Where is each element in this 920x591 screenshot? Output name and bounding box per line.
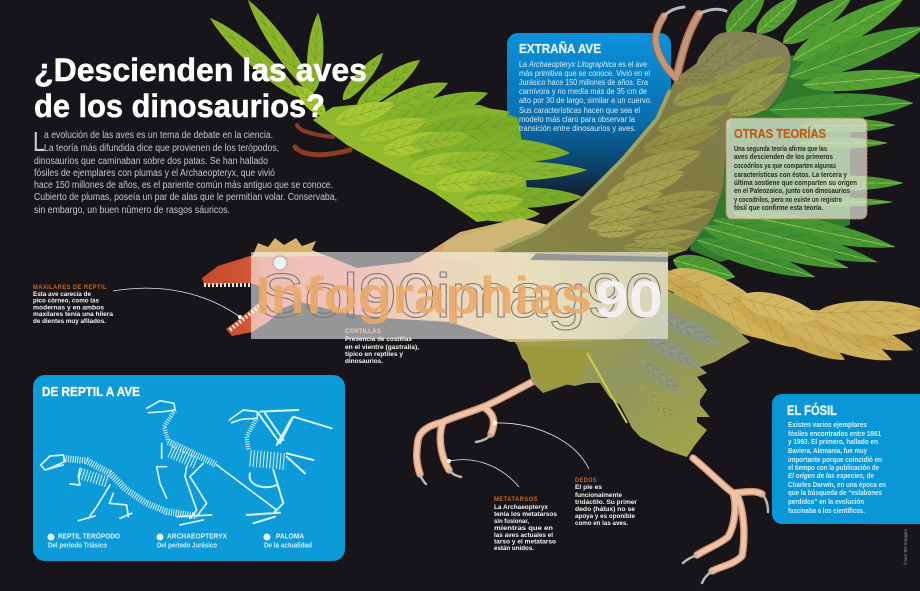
callout: metatarsos: mientras que en (494, 525, 553, 532)
callout: metatarsos: La Archaeopteryx (494, 504, 548, 511)
green far wing feathers (204, 0, 587, 223)
right leg and foot (683, 458, 768, 583)
panel: el fósil: fósiles encontrados entre 1861 (788, 430, 881, 438)
callout lines (113, 288, 589, 487)
intro text: sin embargo, un buen número de rasgos sáuricos. (34, 205, 230, 216)
callout: metatarsos: están unidos. (494, 545, 534, 552)
watermark (251, 252, 668, 339)
panel: el fósil: el tiempo con la publicación de (788, 464, 879, 472)
callout: maxilares de reptil: MAXILARES DE REPTIL (33, 284, 107, 291)
text: extraña ave (519, 41, 652, 133)
intro text: a evolución de las aves es un tema de debate en la ciencia. (44, 130, 273, 141)
panel: el fósil: El origen de las especies, de (788, 472, 874, 480)
legend: reptil terópodo (48, 532, 120, 550)
legend: archaeopteryx (156, 532, 227, 550)
panel: otras teorías: cocodrilos ya que comparten algunas (734, 163, 836, 170)
callout: maxilares de reptil (33, 284, 113, 325)
callout: dedos (575, 477, 637, 527)
panel: otras teorías: OTRAS TEORÍAS (734, 126, 826, 141)
panel: el fósil (772, 394, 920, 524)
skeleton: paloma (229, 410, 332, 523)
left leg and foot (417, 378, 540, 484)
far wing claws (295, 125, 350, 155)
text: extraña ave: modelo más claro para observar la (519, 115, 636, 124)
crest (252, 238, 326, 257)
callout: costillas: COSTILLAS (345, 328, 381, 335)
panel: otras teorías: características con éstos. La tercera y (734, 172, 847, 179)
callout: maxilares de reptil: Esta ave carecía de (33, 291, 91, 298)
callout: costillas (345, 328, 419, 365)
golden tail feathers (660, 258, 920, 374)
panel: el fósil: que la búsqueda de “eslabones (788, 489, 882, 497)
callout: dedos: DEDOS (575, 477, 597, 484)
panel: otras teorías (726, 118, 867, 219)
legend: paloma: De la actualidad (264, 542, 312, 550)
panel: el fósil: Charles Darwin, en una época en (788, 481, 886, 489)
callout: maxilares de reptil: maxilares tenía una hilera (33, 311, 113, 318)
skeleton: reptil terópodo (41, 455, 197, 521)
legend: archaeopteryx: Del período Jurásico (157, 542, 217, 550)
legend: paloma: PALOMA (276, 532, 305, 540)
callout: dedos: tridáctilo. Su primer (575, 499, 637, 506)
intro text: dinosaurios que caminaban sobre dos patas. Se han hallado (34, 156, 268, 167)
teeth (204, 285, 262, 330)
text: extraña ave: carnívora y no medía más de 35 cm de (519, 87, 648, 96)
intro text: hace 150 millones de años, es el pariente común más antiguo que se conoce. (34, 180, 333, 191)
callout: costillas: en el vientre (gastralia), (345, 344, 419, 351)
text: extraña ave: alto por 30 de largo, similar a un cuervo. (519, 96, 652, 105)
text: extraña ave: más primitiva que se conoce. Vivió en el (519, 69, 650, 78)
panel: otras teorías: aves descienden de los primeros (734, 154, 833, 161)
panel: otras teorías: última sostiene que comparten su origen (734, 180, 857, 187)
callout: maxilares de reptil: modernas y en ambos (33, 304, 104, 312)
panel: otras teorías: en el Paleozoico, junto con dinosaurios (734, 188, 850, 195)
callout: maxilares de reptil: de dientes muy afilados. (33, 318, 106, 325)
panel: de reptil a ave (33, 375, 345, 561)
callout: metatarsos: tenía los metatarsos (494, 511, 557, 518)
text: extraña ave: transición entre dinosaurios y aves. (519, 124, 636, 133)
panel: otras teorías: y cocodrilos, pero no existe un registro (734, 197, 842, 204)
legend: archaeopteryx: ARCHAEOPTERYX (167, 532, 227, 540)
callout: dedos: dedo (hálux) no se (575, 506, 635, 513)
panel background: extraña ave (507, 33, 671, 203)
lower body plumage (505, 290, 750, 457)
panel: otras teorías: fósil que confirme esta teoría. (734, 205, 823, 212)
callout: dedos: como en las aves. (575, 520, 628, 527)
intro text: La teoría más difundida dice que provienen de los terópodos, (44, 143, 279, 154)
credit: ©Sol 90 Images (902, 528, 908, 565)
callout: metatarsos: tarso y el metatarso (494, 538, 556, 546)
callout: metatarsos: sin fusionar, (494, 518, 529, 525)
intro text: fósiles de ejemplares con plumas y el Archaeopteryx, que vivió (34, 168, 275, 179)
intro text: L (33, 126, 45, 157)
watermark: Infographias (255, 267, 592, 325)
callout: dedos: El pie es (575, 484, 602, 491)
callout: costillas: típico en reptiles y (345, 351, 403, 358)
legend: reptil terópodo: REPTIL TERÓPODO (58, 532, 120, 540)
panel: el fósil: y 1993. El primero, hallado en (788, 438, 878, 446)
callout: metatarsos: las aves actuales el (494, 532, 553, 539)
text: extraña ave: Jurásico hace 150 millones de años. Era (519, 78, 649, 87)
callout: dedos: apoya y es oponible (575, 513, 635, 520)
upper body tan patch (440, 220, 556, 258)
panel: el fósil: Existen varios ejemplares (788, 421, 867, 429)
title: de los dinosaurios? (34, 88, 325, 124)
panel: el fósil: importante porque coincidió en (788, 456, 882, 464)
callout: metatarsos (494, 496, 557, 552)
raised wing claws (656, 7, 726, 78)
panel: otras teorías: Una segunda teoría afirma que las (734, 146, 827, 153)
text: extraña ave: EXTRAÑA AVE (519, 41, 601, 56)
eye (273, 256, 287, 270)
skeleton: archaeopteryx (147, 401, 277, 525)
near wing (495, 30, 794, 257)
watermark: Sol90imag90 (258, 262, 663, 331)
callout: costillas: dinosaurios. (345, 358, 383, 365)
panel: el fósil: perdidos” en la evolución (788, 498, 864, 506)
head, neck and upper body (202, 218, 668, 342)
callout: metatarsos: METATARSOS (494, 496, 538, 503)
panel: el fósil: fascinaba a los científicos. (788, 507, 865, 515)
callout: dedos: funcionalmente (575, 492, 622, 499)
panel: el fósil: EL FÓSIL (787, 401, 837, 418)
title (34, 52, 367, 124)
green back feathers (right side) (670, 0, 920, 288)
intro text: Cubierto de plumas, poseía un par de alas que le permitían volar. Conservaba, (34, 192, 337, 203)
watermark: 90 (595, 271, 663, 329)
legend: reptil terópodo: Del período Triásico (48, 542, 107, 550)
intro text (33, 126, 337, 216)
panel: de reptil a ave: DE REPTIL A AVE (42, 384, 140, 399)
callout: costillas: Presencia de costillas (345, 336, 412, 343)
panel: el fósil: Baviera, Alemania, fue muy (788, 447, 867, 455)
callout: maxilares de reptil: pico córneo, como las (33, 298, 99, 304)
text: extraña ave: Sus características hacen que sea el (519, 106, 640, 115)
legend: paloma (264, 532, 312, 550)
title: ¿Descienden las aves (34, 52, 367, 88)
text: extraña ave: La Archaeopteryx Litographica es el ave (519, 60, 648, 69)
